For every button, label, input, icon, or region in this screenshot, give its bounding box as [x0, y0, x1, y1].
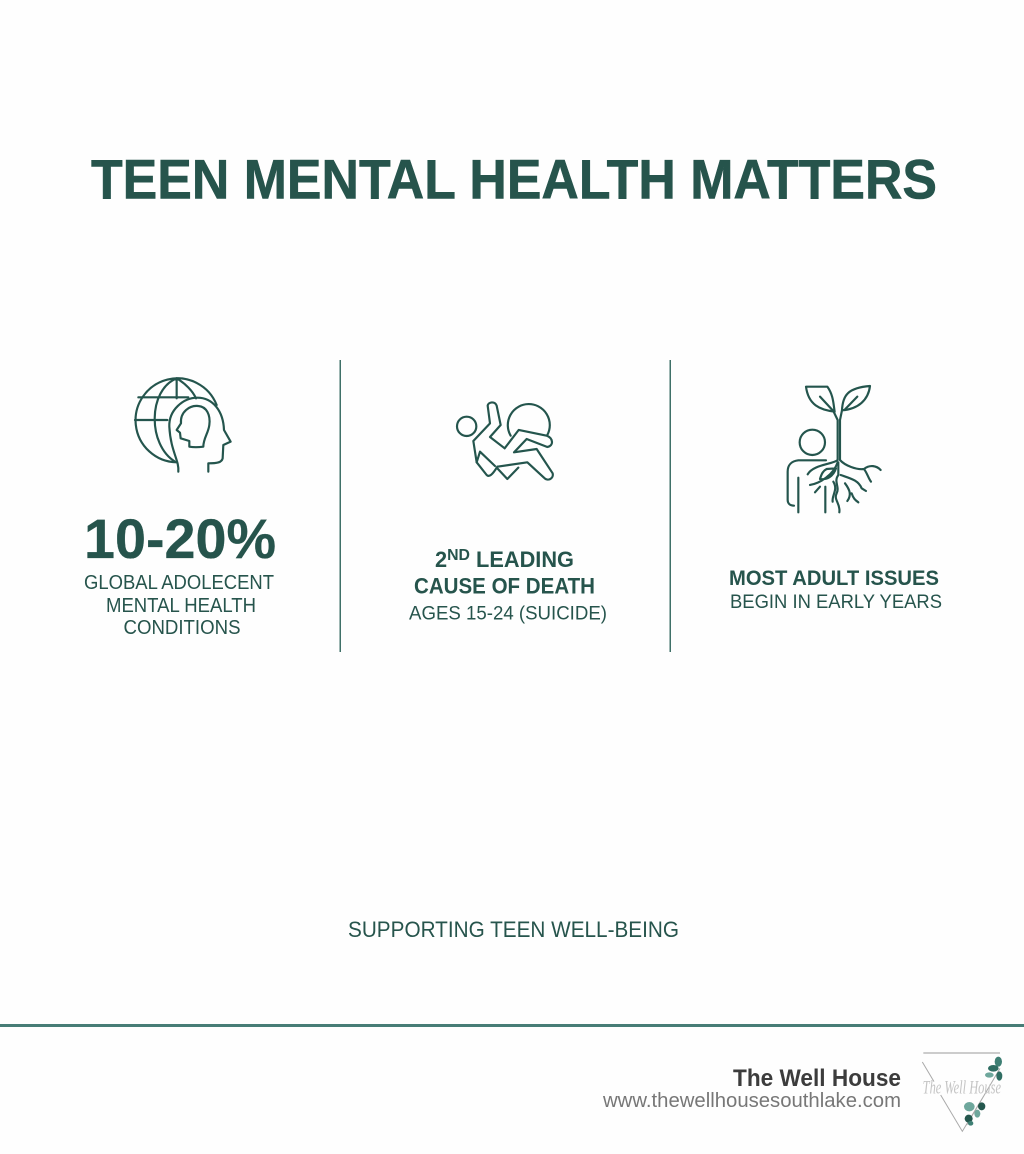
icon: globe and head — [135, 378, 231, 472]
text: global adolescent conditions: MENTAL HEALTH — [106, 595, 256, 617]
footer brand name: The Well House — [733, 1065, 901, 1092]
heading: most adult issues: MOST ADULT ISSUES — [729, 567, 939, 590]
tagline: SUPPORTING TEEN WELL-BEING — [348, 917, 679, 942]
text: begin in early years: BEGIN IN EARLY YEARS — [730, 591, 942, 613]
heading: 2nd leading cause of death — [414, 547, 595, 598]
logo — [922, 1053, 1002, 1131]
statistic: 10-20%: 10-20% — [84, 507, 276, 570]
heading: 2nd leading cause of death: LEADING — [470, 547, 574, 572]
text: global adolescent conditions: CONDITIONS — [124, 617, 240, 639]
text: ages 15-24: AGES 15-24 (SUICIDE) — [409, 602, 607, 624]
footer rule — [0, 1024, 1024, 1027]
panel: leading cause of death — [409, 402, 607, 624]
divider right — [670, 360, 671, 652]
logo leaves — [964, 1057, 1002, 1126]
footer website: www.thewellhousesouthlake.com — [602, 1090, 901, 1112]
text: global adolescent conditions: GLOBAL ADOLECENT — [84, 572, 274, 594]
heading: 2nd leading cause of death: CAUSE OF DEATH — [414, 574, 595, 598]
icon: falling figure — [457, 402, 553, 480]
panel: adult issues — [729, 386, 942, 613]
panel: global statistic — [84, 378, 276, 639]
text: global adolescent conditions — [84, 572, 274, 639]
divider left — [340, 360, 341, 652]
heading: 2nd leading cause of death: 2 — [435, 547, 447, 572]
title: TEEN MENTAL HEALTH MATTERS — [91, 148, 937, 210]
icon: person with rooted plant — [788, 386, 881, 512]
heading: 2nd leading cause of death: ND — [447, 547, 470, 564]
